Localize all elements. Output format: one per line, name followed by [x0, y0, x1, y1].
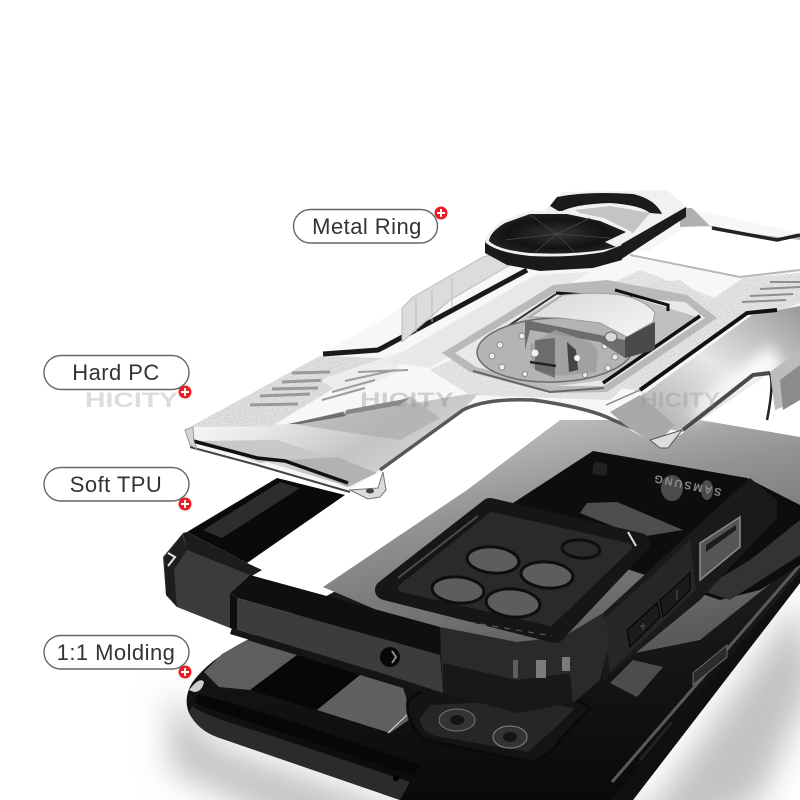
- case base: [185, 203, 800, 490]
- corner tab: [350, 472, 386, 499]
- octagon camera plate: [442, 280, 717, 393]
- label: Hard PC: [44, 356, 192, 398]
- camera holes: [431, 538, 601, 619]
- lower body panel: [193, 392, 480, 487]
- phone left gloss panels: [189, 640, 420, 800]
- label: 1:1 Molding: 1:1 Molding: [57, 640, 175, 665]
- label: Soft TPU: [44, 468, 192, 510]
- central speckled haze: [430, 270, 720, 400]
- left textured panel: [190, 356, 383, 427]
- right textured panel: [612, 273, 800, 392]
- bumper side wall far left: [187, 478, 345, 563]
- volume buttons: [627, 573, 690, 647]
- phone body: [187, 500, 800, 800]
- disc brushed lines: [505, 215, 610, 253]
- phone right side edge: [610, 565, 800, 800]
- spring mechanism bump: [525, 293, 655, 378]
- clear hard PC case: [185, 203, 800, 499]
- label: 1:1 Molding: [44, 636, 192, 678]
- bumper bottom right corner: [440, 613, 610, 713]
- black lower edge: [185, 427, 350, 492]
- watermark right: HICITY: [640, 389, 720, 412]
- phone camera bump: [408, 680, 590, 762]
- TPU bumper: [163, 451, 800, 713]
- label: Hard PC: Hard PC: [72, 360, 160, 385]
- ring frame: [545, 190, 687, 250]
- bumper interior: [513, 451, 800, 600]
- left panel stripes: [250, 372, 330, 405]
- soft shadow under phone: [170, 600, 800, 800]
- ring base: [485, 240, 622, 271]
- label: Soft TPU: Soft TPU: [70, 472, 162, 497]
- lower right rail area: [606, 306, 800, 448]
- bumper right wall: [603, 478, 777, 680]
- ring white rim: [485, 211, 632, 256]
- inner round plate: [476, 315, 634, 385]
- top window panel: [620, 208, 800, 277]
- back phone: [187, 500, 800, 800]
- bumper front face band: [230, 575, 443, 698]
- bumper front face left corner: [163, 533, 250, 628]
- phone back seen through case: [323, 420, 800, 660]
- charging port hole: [380, 647, 400, 667]
- watermarks: [85, 389, 720, 412]
- label: Metal Ring: Metal Ring: [312, 214, 422, 239]
- label: Metal Ring: [294, 206, 448, 243]
- rivets: [489, 333, 618, 378]
- ring disc: [489, 214, 626, 254]
- bumper top ledge: [183, 532, 262, 577]
- watermark centre: HICITY: [360, 389, 454, 412]
- metal ring holder: [485, 190, 687, 271]
- watermark left: HICITY: [85, 389, 178, 412]
- curved lower case edge: [380, 400, 652, 470]
- camera island: [385, 508, 640, 636]
- ring black arm: [620, 207, 686, 260]
- upper-left black rail: [323, 245, 590, 368]
- mirrored brand text: SAMSUNG: [651, 471, 723, 498]
- lower gray facets: [200, 352, 440, 487]
